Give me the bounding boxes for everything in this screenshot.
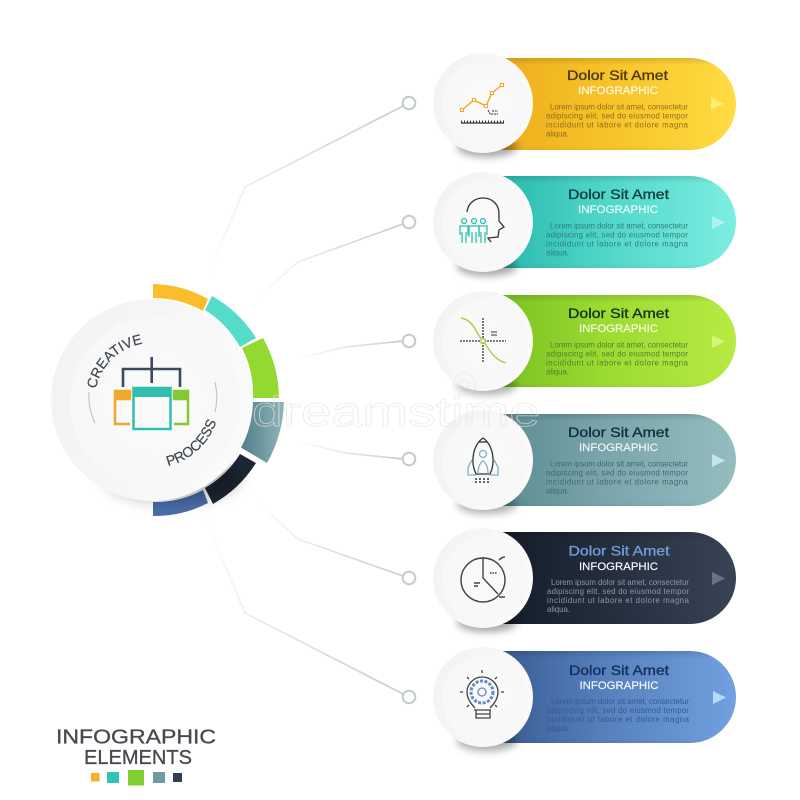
white circle — [433, 291, 533, 391]
central diagram — [51, 284, 284, 516]
body text: aliqua. — [546, 130, 569, 138]
heading: Dolor Sit Amet — [568, 186, 669, 202]
icon: line chart — [460, 84, 504, 123]
body text: aliqua. — [547, 724, 570, 733]
body text: aliqua. — [546, 368, 569, 376]
white circle — [433, 53, 533, 153]
circle shadow — [457, 731, 517, 751]
icon: rocket — [468, 438, 498, 482]
body text: adipiscing elit, sed do eiusmod tempor — [547, 587, 689, 596]
ring segment: green — [242, 338, 279, 398]
arrow — [712, 572, 725, 585]
body text: aliqua. — [546, 486, 569, 496]
body text — [547, 697, 690, 733]
inner circle — [442, 62, 528, 148]
pill — [440, 58, 736, 150]
ring segment: blue — [153, 490, 208, 516]
disc shadow — [104, 454, 240, 502]
body text: adipiscing elit, sed do eiusmod tempor — [547, 706, 689, 715]
legend title: INFOGRAPHIC — [56, 726, 216, 748]
body text — [546, 460, 689, 496]
label: creative: CREATIVE — [88, 334, 142, 388]
pill — [440, 532, 736, 624]
body text: incididunt ut labore et dolore magna — [547, 715, 690, 724]
connector line 4 — [297, 441, 415, 465]
connector line 1 — [207, 97, 415, 277]
connector line 3 — [297, 335, 415, 359]
arrow — [712, 335, 725, 348]
legend subtitle: ELEMENTS — [84, 747, 192, 769]
body text: aliqua. — [546, 248, 569, 258]
legend — [56, 726, 216, 786]
side arcs — [89, 382, 217, 423]
arrow — [711, 97, 724, 110]
watermark — [252, 373, 540, 435]
body text: Lorem ipsum dolor sit amet, consectetur — [550, 222, 688, 230]
subheading: INFOGRAPHIC — [579, 442, 658, 454]
inner circle — [442, 300, 528, 386]
body text: incididunt ut labore et dolore magna — [546, 358, 689, 368]
white circle — [433, 410, 533, 510]
body text: adipiscing elit, sed do eiusmod tempor — [546, 350, 688, 358]
body text — [547, 578, 690, 614]
heading: Dolor Sit Amet — [568, 424, 669, 440]
body text: Lorem ipsum dolor sit amet, consectetur — [550, 460, 688, 468]
subheading: INFOGRAPHIC — [578, 204, 658, 216]
card 1 — [433, 53, 736, 157]
watermark: dreamstime — [252, 388, 540, 435]
heading: Dolor Sit Amet — [567, 67, 668, 83]
white circle — [433, 528, 533, 628]
card 5 — [433, 528, 736, 632]
pill — [440, 295, 736, 387]
pill — [440, 176, 736, 268]
body text: Lorem ipsum dolor sit amet, consectetur — [550, 102, 688, 112]
label: process: PROCESS — [166, 419, 216, 466]
arrow — [712, 216, 725, 229]
body text: incididunt ut labore et dolore magna — [546, 478, 689, 486]
connector line 2 — [255, 216, 415, 300]
pill — [440, 414, 736, 506]
circle shadow — [457, 137, 517, 157]
body text — [546, 102, 689, 138]
body text: incididunt ut labore et dolore magna — [546, 240, 689, 248]
card 4 — [433, 410, 736, 514]
icon: hierarchy — [114, 357, 189, 429]
circle shadow — [457, 256, 517, 276]
subheading: INFOGRAPHIC — [579, 561, 658, 573]
white circle — [433, 647, 533, 747]
body text — [546, 340, 689, 376]
heading: Dolor Sit Amet — [569, 662, 669, 678]
subheading: INFOGRAPHIC — [578, 85, 658, 97]
body text: incididunt ut labore et dolore magna — [547, 596, 690, 605]
ring segment: yellow — [153, 284, 208, 311]
body text: aliqua. — [547, 605, 570, 614]
inner circle — [442, 536, 528, 622]
subheading: INFOGRAPHIC — [580, 680, 659, 692]
icon: head with team — [460, 198, 504, 243]
circle shadow — [457, 612, 517, 632]
connector line 5 — [255, 500, 415, 584]
card 3 — [433, 291, 736, 395]
icon: curve on axes — [460, 318, 506, 363]
main disc — [51, 299, 253, 501]
inner disc — [70, 317, 240, 487]
icon: light bulb gear — [460, 670, 504, 718]
heading: Dolor Sit Amet — [568, 305, 669, 321]
card 6 — [433, 647, 736, 751]
icon: pie clock — [461, 557, 505, 602]
arrow — [712, 454, 725, 467]
body text: Lorem ipsum dolor sit amet, consectetur — [550, 340, 688, 350]
arrow — [713, 691, 726, 704]
body text — [546, 222, 689, 258]
body text: adipiscing elit, sed do eiusmod tempor — [546, 468, 688, 478]
legend swatches — [91, 770, 182, 786]
heading: Dolor Sit Amet — [568, 542, 670, 558]
ring segment: slate — [240, 402, 284, 463]
body text: adipiscing elit, sed do eiusmod tempor — [546, 230, 688, 240]
inner circle — [442, 180, 528, 266]
inner circle — [442, 656, 528, 742]
connector line 6 — [207, 523, 415, 703]
body text: incididunt ut labore et dolore magna — [546, 120, 689, 130]
subheading: INFOGRAPHIC — [579, 323, 658, 335]
body text: adipiscing elit, sed do eiusmod tempor — [546, 112, 688, 120]
ring segment: teal — [205, 296, 256, 347]
white circle — [433, 172, 533, 272]
circle shadow — [457, 375, 517, 395]
card 2 — [433, 172, 736, 276]
inner circle — [442, 418, 528, 504]
ring segment: dark — [205, 454, 256, 504]
pill — [440, 651, 736, 743]
body text: Lorem ipsum dolor sit amet, consectetur — [551, 697, 689, 706]
circle shadow — [457, 494, 517, 514]
body text: Lorem ipsum dolor sit amet, consectetur — [551, 578, 689, 587]
